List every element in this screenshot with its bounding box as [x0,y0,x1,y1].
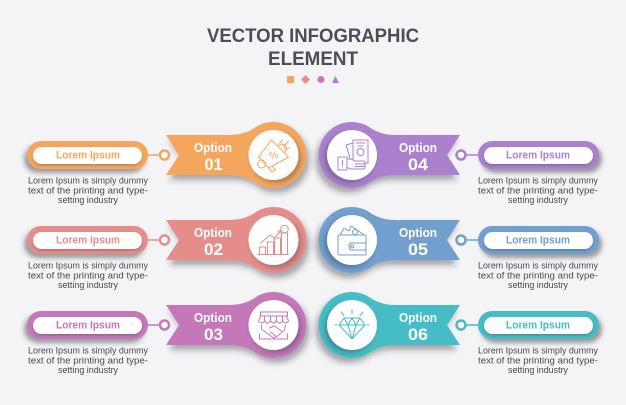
badge: option 04: 04 [408,155,429,174]
pill: option 04 [466,141,599,169]
description: option 05 [478,260,598,290]
panel: option 01 [27,122,306,205]
icon: megaphone [258,140,290,172]
description: option 06: setting industry [508,365,568,375]
title [207,25,419,70]
pill: option 06: Lorem Ipsum [506,320,570,332]
description: option 06 [478,346,598,375]
title: VECTOR INFOGRAPHIC [207,25,419,47]
icon: money in hand [338,140,368,170]
badge: option 05: Option [399,226,437,240]
description: option 04: text of the printing and type- [478,186,598,196]
description: option 06: Lorem Ipsum is simply dummy [478,346,598,356]
title: ELEMENT [268,48,358,70]
badge: option 03 [160,292,306,358]
icon: diamond [335,310,369,339]
description: option 02: text of the printing and type- [28,270,148,280]
pill: option 04: Lorem Ipsum [506,150,570,162]
badge: option 05 [319,207,466,273]
description: option 06: text of the printing and type- [478,356,598,366]
description: option 01: setting industry [58,195,118,205]
panel: option 02 [27,207,306,290]
pill: option 05 [466,226,599,254]
panel: option 06 [319,292,599,375]
badge: option 03: Option [194,311,232,325]
badge: option 06: Option [399,311,437,325]
badge: option 04: Option [399,141,437,155]
badge: option 04 [319,122,466,188]
description: option 05: Lorem Ipsum is simply dummy [478,260,598,270]
description: option 03: setting industry [58,365,118,375]
pill: option 01: Lorem Ipsum [56,150,120,162]
badge: option 06: 06 [408,325,428,344]
badge: option 06 [319,292,466,358]
description: option 04: setting industry [508,195,568,205]
description: option 03 [28,346,148,375]
icon: shop handshake [258,312,288,339]
badge: option 05: 05 [408,240,428,259]
badge: option 01: Option [194,141,232,155]
badge: option 01: 01 [204,155,222,174]
badge: option 02: Option [194,226,232,240]
icon: megaphone: % [268,150,279,162]
icon: wallet [338,226,366,255]
description: option 01: Lorem Ipsum is simply dummy [28,176,148,186]
description: option 05: text of the printing and type- [478,270,598,280]
badge: option 02: 02 [204,240,223,259]
pill: option 01 [27,141,160,169]
pill: option 03: Lorem Ipsum [56,320,120,332]
description: option 03: text of the printing and type- [28,356,148,366]
description: option 02 [28,260,148,290]
pill: option 03 [27,311,160,339]
icon: growth chart [258,225,288,254]
panel: option 03 [27,292,306,375]
pill: option 02 [27,226,160,254]
pill: option 02: Lorem Ipsum [56,234,120,246]
badge: option 02 [160,207,306,273]
description: option 04: Lorem Ipsum is simply dummy [478,176,598,186]
description: option 03: Lorem Ipsum is simply dummy [28,346,148,356]
badge: option 03: 03 [204,325,223,344]
description: option 05: setting industry [508,280,568,290]
decorative shape row [287,75,339,84]
badge: option 01 [160,122,306,188]
description: option 01 [28,176,148,205]
pill: option 06 [466,311,599,339]
description: option 02: Lorem Ipsum is simply dummy [28,260,148,270]
panel: option 04 [319,122,599,205]
description: option 02: setting industry [58,280,118,290]
description: option 01: text of the printing and type- [28,186,148,196]
description: option 04 [478,176,598,205]
pill: option 05: Lorem Ipsum [506,234,570,246]
panel: option 05 [319,207,599,290]
